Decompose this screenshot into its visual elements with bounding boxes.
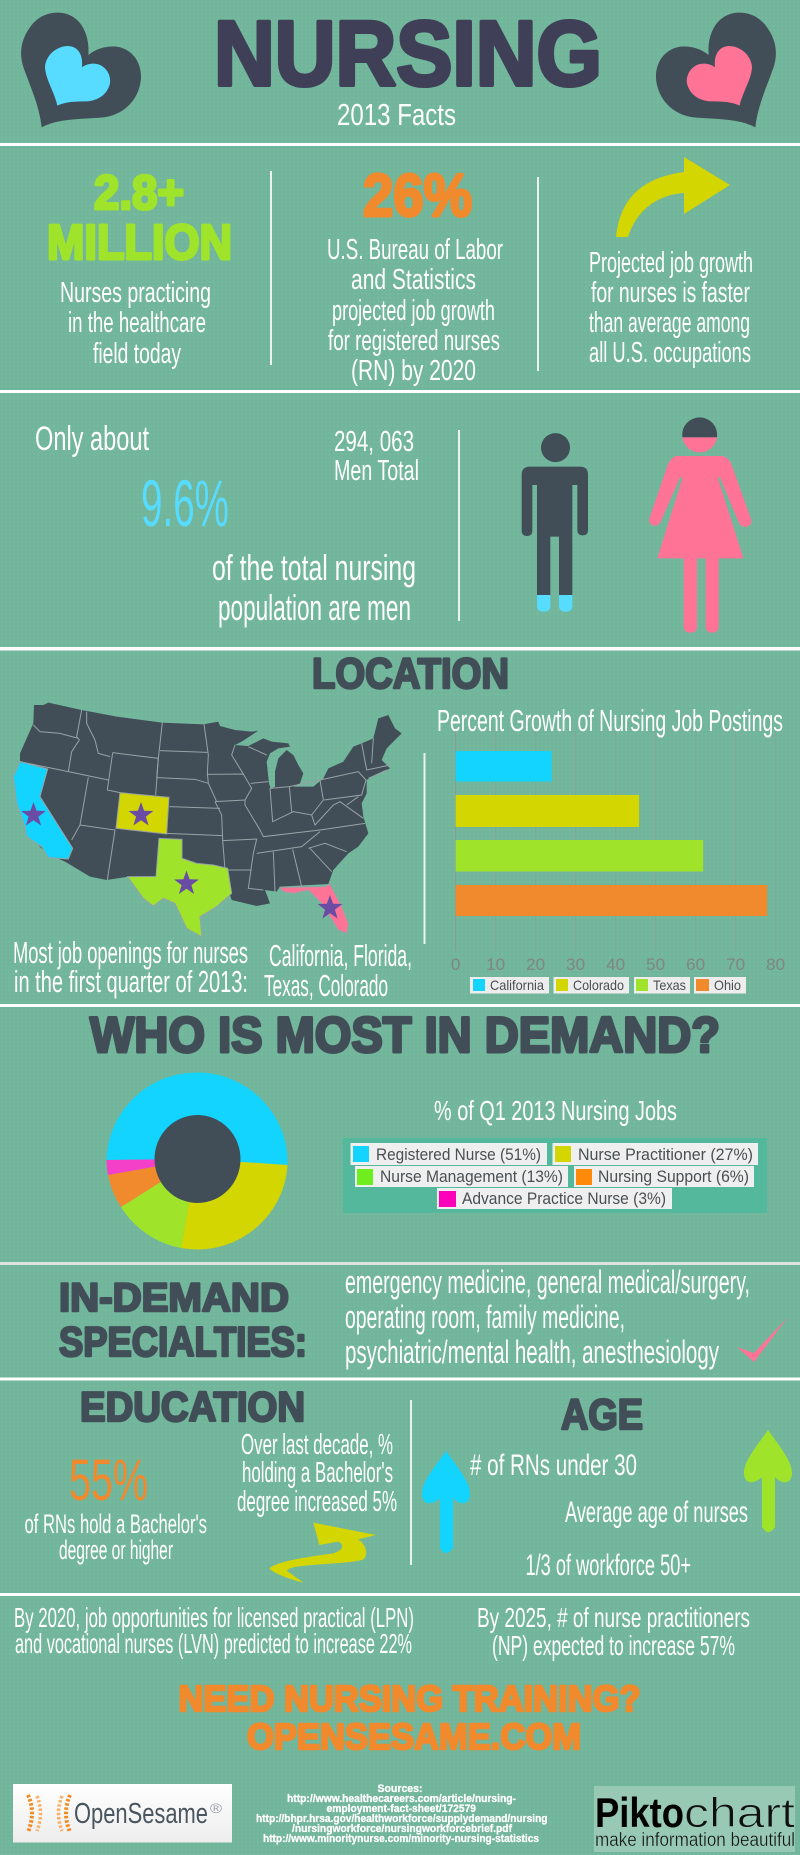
axis labels: 70 [726,955,745,974]
icon: lime up arrow [744,1430,792,1532]
heading: who is most in demand: WHO IS MOST IN DEMAND? [90,1007,720,1063]
bar: Texas [456,840,703,872]
text: states list [264,938,412,1003]
title: NURSING [214,3,602,105]
logo: Piktochart: Pikto [595,1789,684,1836]
call to action: NEED NURSING TRAINING? [178,1678,640,1719]
text: men total: Men Total [334,455,419,487]
text: most job openings: in the first quarter of 2013: [14,964,248,999]
icon: curved arrow [616,157,730,237]
state: California [13,762,73,859]
text: NP forecast [477,1602,750,1661]
text: bureau of labor [327,234,503,387]
text: sources: http://www.healthecareers.com/article/nursing- [287,1793,516,1805]
icon: star Florida [318,895,342,918]
donut legend [343,1138,767,1213]
logo: OpenSesame: ® [210,1800,223,1816]
text: states list: California, Florida, [269,938,412,973]
axis labels: 80 [766,955,785,974]
state: Texas [128,838,232,937]
text: workforce 50+: 1/3 of workforce 50+ [526,1549,691,1582]
icon: left heart [21,13,141,127]
icon: star Texas [174,870,199,894]
chart legend: California [490,977,544,993]
text: of the total nursing population: population are men [218,587,411,628]
donut legend: Nurse Management (13%) [380,1167,563,1186]
text: nurses practicing [60,277,211,370]
bar: Ohio [456,885,767,916]
text: sources [256,1783,548,1845]
stat: 26%: 26% [363,162,472,229]
donut legend: Nursing Support (6%) [598,1167,749,1186]
subtitle: 2013 Facts [337,97,456,132]
axis labels: 20 [526,955,545,974]
text: nurses practicing: field today [93,338,181,370]
axis labels: 60 [686,955,705,974]
donut legend: Registered Nurse (51%) [376,1145,541,1164]
icon: star California [21,802,46,826]
call to action: OPENSESAME.COM [247,1716,581,1757]
text: most job openings [13,935,248,999]
text: bureau of labor: for registered nurses [328,325,500,357]
chart legend: Texas [653,977,686,993]
state: Colorado [116,793,169,834]
logo: OpenSesame: OpenSesame [74,1798,208,1830]
text: LPN and LVN forecast [14,1602,414,1659]
chart legend [470,977,746,994]
chart legend: Colorado [573,977,624,993]
bar: Colorado [456,795,639,827]
heading: in-demand specialties: SPECIALTIES: [59,1318,307,1365]
panel: men in nursing [35,417,751,633]
text: sources: employment-fact-sheet/172579 [326,1803,476,1815]
panel: education [24,1383,397,1583]
bar: California [456,751,552,782]
text: nurses practicing: in the healthcare [68,307,206,339]
text: of the total nursing population [212,547,416,628]
text: men total: 294, 063 [334,426,414,458]
text: most job openings: Most job openings for nurses [13,935,248,970]
logo: OpenSesame [13,1784,232,1842]
chart: percent growth of nursing job postings [437,703,785,994]
text: hold a bachelor's [24,1509,207,1565]
heading: age: AGE [561,1391,643,1439]
panel: nurse statistics [47,157,753,387]
text: bureau of labor: projected job growth [332,295,495,327]
chart legend: Ohio [714,977,741,993]
text: over last decade [237,1429,397,1518]
text: states list: Texas, Colorado [264,968,388,1003]
text: LPN and LVN forecast: and vocational nurses (LVN) predicted to increase 22% [15,1628,412,1659]
icon: cyan up arrow [422,1451,470,1553]
icon: woman [649,417,751,633]
icon: check mark [737,1317,788,1362]
text: sources: http://bhpr.hrsa.gov/healthworkforce/supplydemand/nursing [256,1813,548,1825]
text: nurses practicing: Nurses practicing [60,277,211,309]
text: hold a bachelor's: of RNs hold a Bachelor's [24,1509,207,1539]
text: bureau of labor: (RN) by 2020 [351,355,476,387]
text: bureau of labor: and Statistics [351,264,476,296]
state borders [20,710,390,892]
axis labels: 10 [486,955,505,974]
text: of the total nursing population: of the total nursing [212,547,416,588]
text: bureau of labor: U.S. Bureau of Labor [327,234,503,266]
stat: 2.8+ million: MILLION [47,216,232,270]
text: specialties list: operating room, family medicine, [345,1299,625,1335]
text: over last decade: degree increased 5% [237,1486,397,1518]
logo: Piktochart [594,1786,795,1852]
text: RNs under 30: # of RNs under 30 [470,1449,637,1482]
text: only about: Only about [35,420,149,458]
icon: right heart [656,13,776,127]
heading: in-demand specialties [59,1276,307,1365]
state: Florida [280,884,348,933]
chart title: percent of jobs: % of Q1 2013 Nursing Jobs [434,1095,677,1126]
stat: 2.8+ million: 2.8+ [94,167,184,220]
text: sources: http://www.minoritynurse.com/minority-nursing-statistics [263,1833,539,1845]
axis labels: 50 [646,955,665,974]
panel: age [422,1391,792,1582]
icon: swoosh arrow [269,1523,376,1583]
text: men total [334,426,419,487]
icon: star Colorado [129,802,153,826]
logo: Piktochart: chart [684,1789,795,1836]
stat: 55%: 55% [69,1448,148,1513]
text: sources: /nursingworkforce/nursingworkforcebrief.pdf [292,1823,512,1835]
heading: education: EDUCATION [80,1383,305,1430]
text: over last decade: Over last decade, % [241,1429,393,1461]
logo mark [28,1795,70,1832]
text: sources: Sources: [378,1783,422,1795]
text: LPN and LVN forecast: By 2020, job opportunities for licensed practical (LPN) [14,1602,414,1633]
heading: location: LOCATION [312,650,509,698]
axis labels [451,955,785,974]
donut chart [106,1072,288,1249]
axis labels: 30 [566,955,585,974]
text: specialties list [345,1264,750,1370]
text: projected job growth [589,247,753,369]
text: hold a bachelor's: degree or higher [59,1535,173,1565]
call to action [178,1678,640,1757]
icon: man [522,433,588,612]
axis labels: 40 [606,955,625,974]
donut legend: Advance Practice Nurse (3%) [462,1189,666,1208]
heading: in-demand specialties: IN-DEMAND [59,1276,289,1320]
axis labels: 0 [451,955,460,974]
stat: 2.8+ million [47,167,232,270]
stat: 9.6%: 9.6% [141,466,229,540]
donut legend: Nurse Practitioner (27%) [578,1145,753,1164]
map: United States [13,703,402,937]
text: over last decade: holding a Bachelor's [242,1457,393,1489]
